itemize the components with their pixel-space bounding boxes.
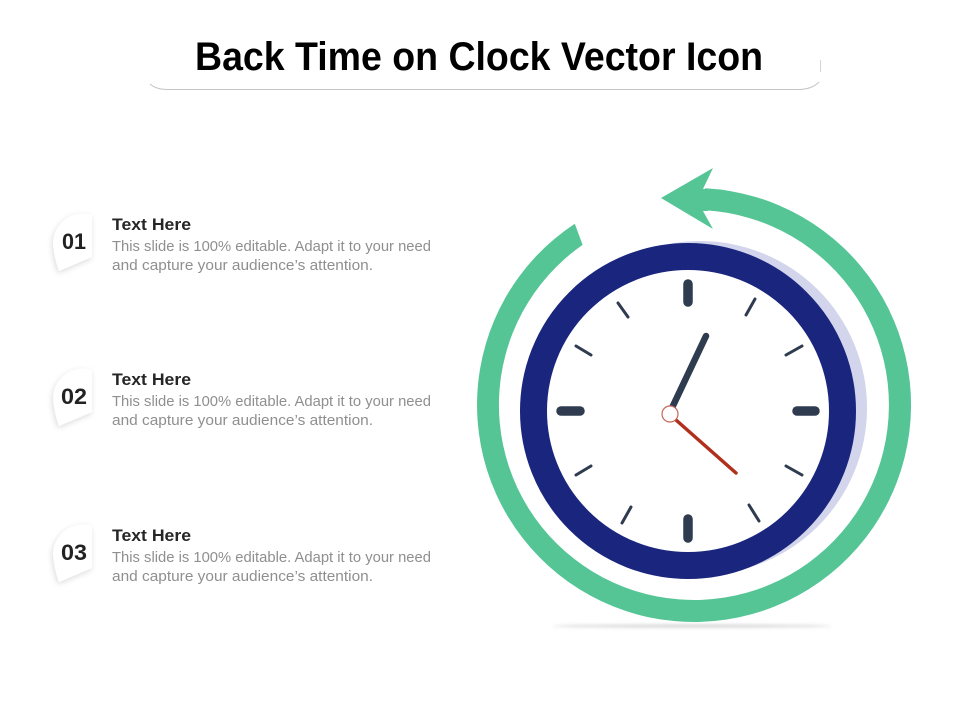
description 01: This slide is 100% editable. Adapt it to your need [112, 238, 431, 255]
description 01 [112, 238, 431, 274]
badge 01: 01 [62, 229, 86, 254]
item 03 [53, 525, 431, 585]
badge 03 [53, 525, 92, 582]
description 02: This slide is 100% editable. Adapt it to your need [112, 393, 431, 410]
badge 02 [53, 369, 92, 426]
badge 02: 02 [61, 384, 87, 409]
description 01: and capture your audience’s attention. [112, 257, 373, 274]
second hand [676, 420, 736, 473]
item 01 [53, 214, 431, 274]
clock illustration [477, 168, 911, 628]
clock back shadow [533, 241, 867, 575]
description 02 [112, 393, 431, 429]
description 03 [112, 549, 431, 585]
description 03: This slide is 100% editable. Adapt it to your need [112, 549, 431, 566]
description 03: and capture your audience’s attention. [112, 568, 373, 585]
hour ticks [561, 284, 815, 538]
heading 01: Text Here [112, 216, 191, 234]
badge 01 [53, 214, 92, 271]
clock hub [662, 406, 678, 422]
heading 03: Text Here [112, 527, 191, 545]
circular arrow [477, 168, 911, 622]
ground shadow [552, 624, 832, 628]
description 02: and capture your audience’s attention. [112, 412, 373, 429]
badge 03: 03 [61, 540, 87, 565]
title panel [150, 35, 820, 90]
heading 02: Text Here [112, 371, 191, 389]
clock face [534, 256, 842, 566]
minute hand [671, 336, 706, 410]
title: Back Time on Clock Vector Icon [195, 35, 763, 79]
item 02 [53, 369, 431, 429]
